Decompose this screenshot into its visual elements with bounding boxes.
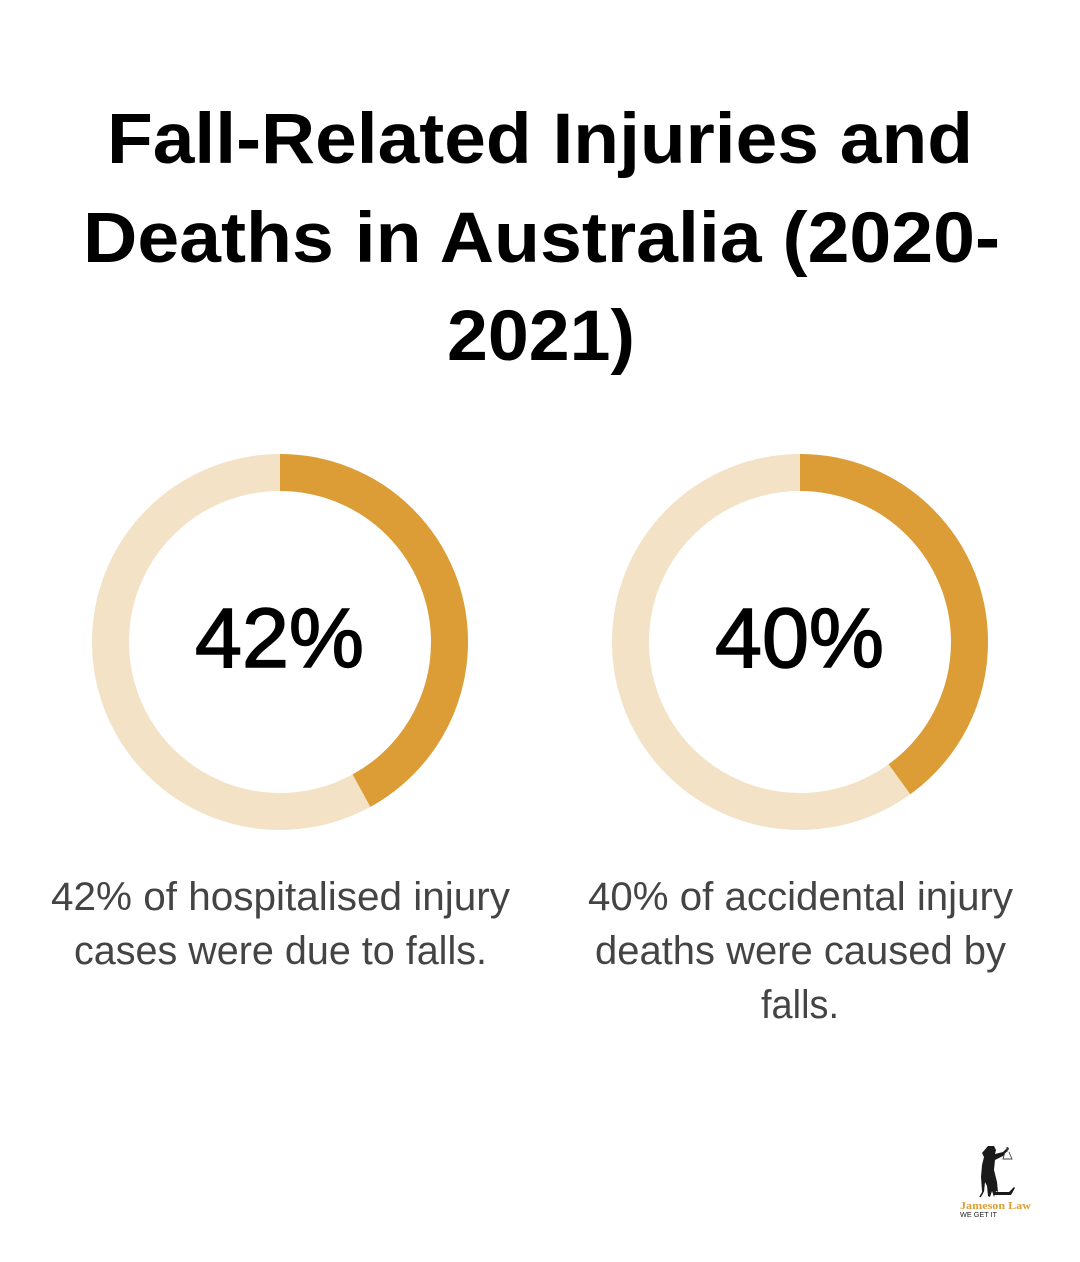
logo wordmark: Jameson Law <box>960 1200 1031 1212</box>
title <box>83 100 1000 376</box>
icon: lady justice figure with scales <box>980 1146 1015 1197</box>
caption: hospitalised injury cases: 42% of hospitalised injury <box>51 875 510 919</box>
caption: accidental injury deaths <box>588 875 1013 1027</box>
title: Deaths in Australia (2020- <box>83 199 1000 278</box>
caption: accidental injury deaths: falls. <box>761 983 839 1027</box>
caption: accidental injury deaths: deaths were caused by <box>595 929 1006 973</box>
caption: accidental injury deaths: 40% of accidental injury <box>588 875 1013 919</box>
donut chart: 42% <box>110 472 450 812</box>
logo: Jameson Law <box>960 1146 1031 1219</box>
value: 40%: 40% <box>715 591 884 685</box>
title: 2021) <box>447 297 635 376</box>
donut chart: 40% <box>630 472 970 812</box>
logo tagline: WE GET IT <box>960 1212 998 1219</box>
title: Fall-Related Injuries and <box>107 100 973 179</box>
caption: hospitalised injury cases: cases were due to falls. <box>74 929 487 973</box>
value: 42%: 42% <box>195 591 364 685</box>
panel: 40% accidental injury deaths <box>588 472 1013 1027</box>
panel: 42% hospitalised injury cases <box>51 472 510 973</box>
caption: hospitalised injury cases <box>51 875 510 973</box>
